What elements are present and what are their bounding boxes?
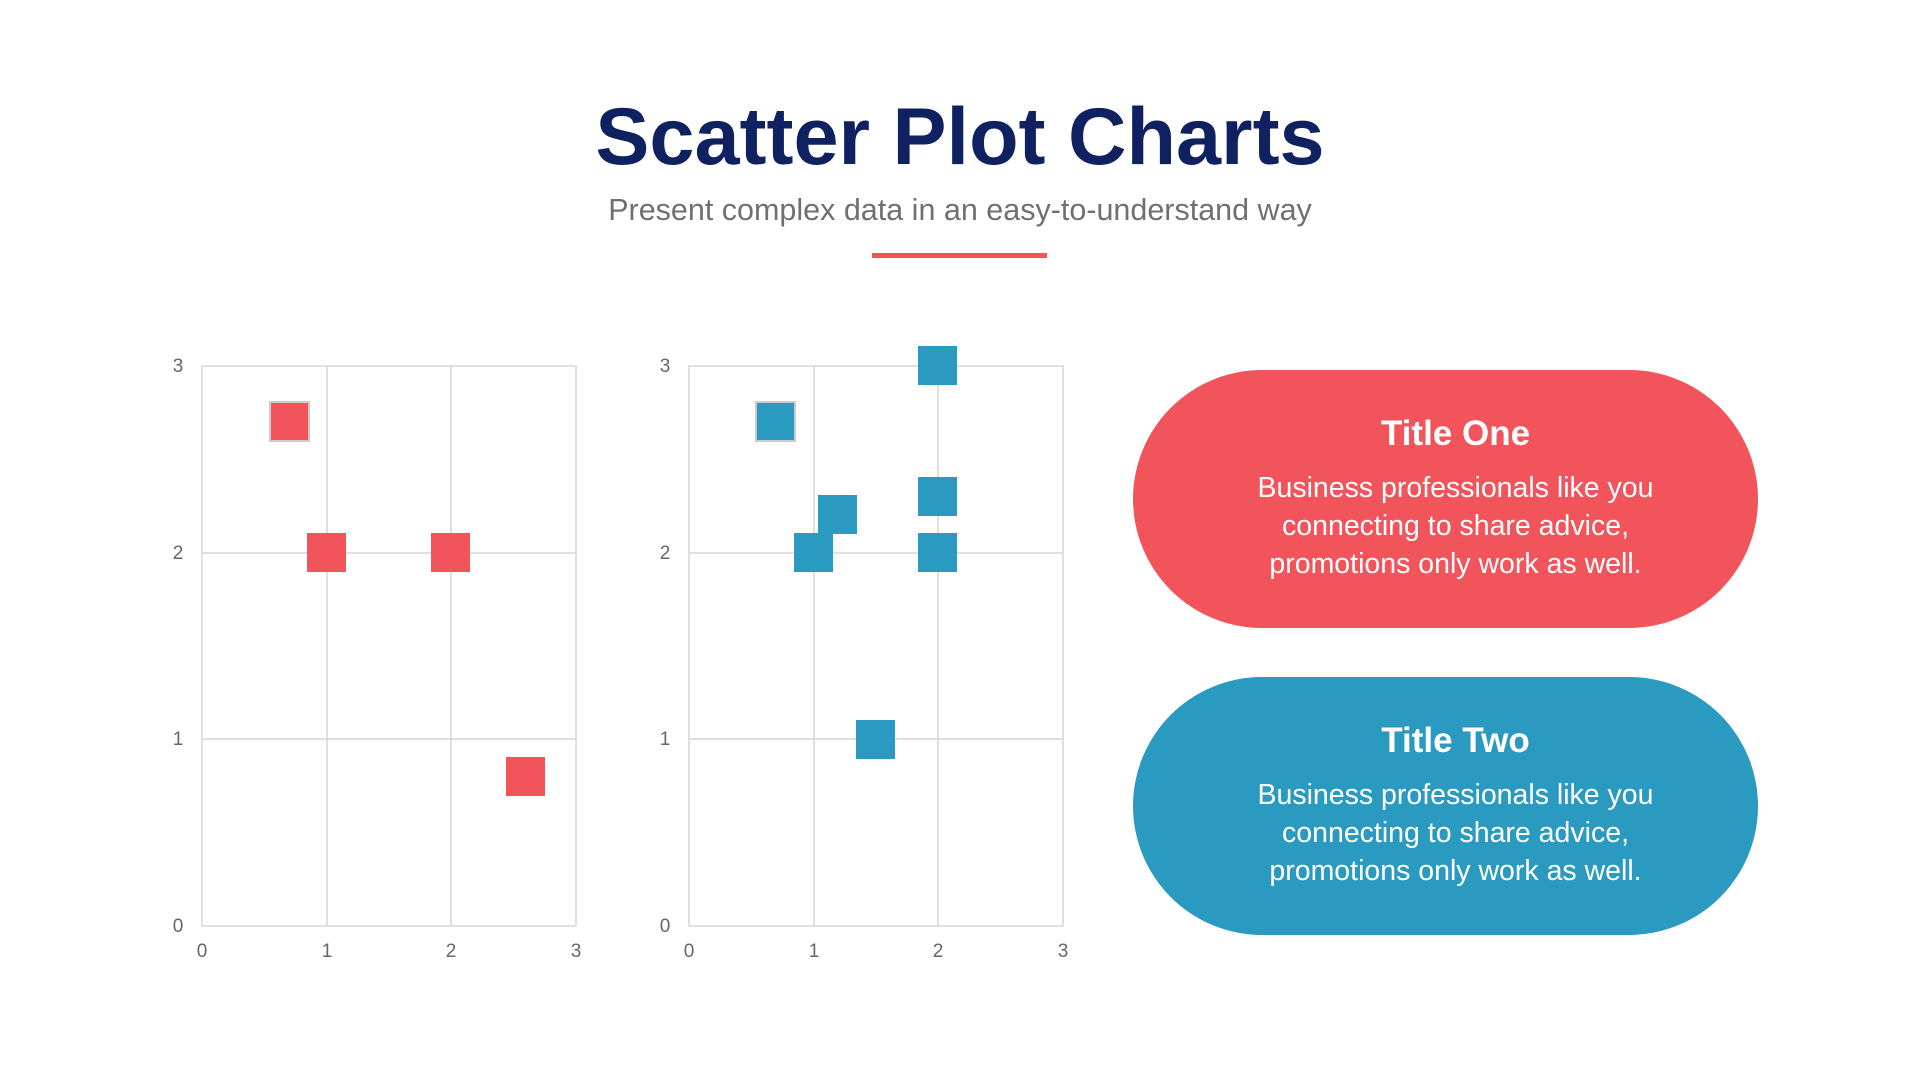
chart: red scatter: 0: [660, 916, 670, 937]
panel: title one: promotions only work as well.: [1269, 548, 1642, 580]
panel: title one: connecting to share advice,: [1282, 510, 1629, 542]
chart: red scatter: 0: [173, 916, 183, 937]
chart: red scatter: 2: [660, 543, 670, 564]
chart: red scatter: 1: [173, 729, 183, 750]
chart: red scatter: 2: [933, 941, 943, 962]
chart: red scatter: 3: [571, 941, 581, 962]
panel: title two: Business professionals like you: [1257, 779, 1654, 811]
chart: red scatter: 0: [684, 941, 694, 962]
chart: red scatter: 1: [322, 941, 332, 962]
chart: red scatter: 2: [173, 543, 183, 564]
subtitle: Present complex data in an easy-to-understand way: [608, 193, 1312, 227]
chart: red scatter: 3: [1058, 941, 1068, 962]
panel: title two: [1133, 677, 1758, 935]
panel: title one: [1133, 370, 1758, 628]
chart: red scatter: 3: [173, 356, 183, 377]
chart: red scatter: 1: [809, 941, 819, 962]
chart: red scatter: 3: [660, 356, 670, 377]
accent line: [872, 253, 1047, 258]
panel: title two: connecting to share advice,: [1282, 817, 1629, 849]
chart: red scatter: 1: [660, 729, 670, 750]
panel: title two: promotions only work as well.: [1269, 855, 1642, 887]
panel: title one: Business professionals like you: [1257, 472, 1654, 504]
chart: red scatter: 0: [197, 941, 207, 962]
chart: red scatter: 2: [446, 941, 456, 962]
panel: title one: Title One: [1381, 414, 1530, 453]
title: Scatter Plot Charts: [595, 92, 1325, 182]
panel: title two: Title Two: [1381, 721, 1530, 760]
